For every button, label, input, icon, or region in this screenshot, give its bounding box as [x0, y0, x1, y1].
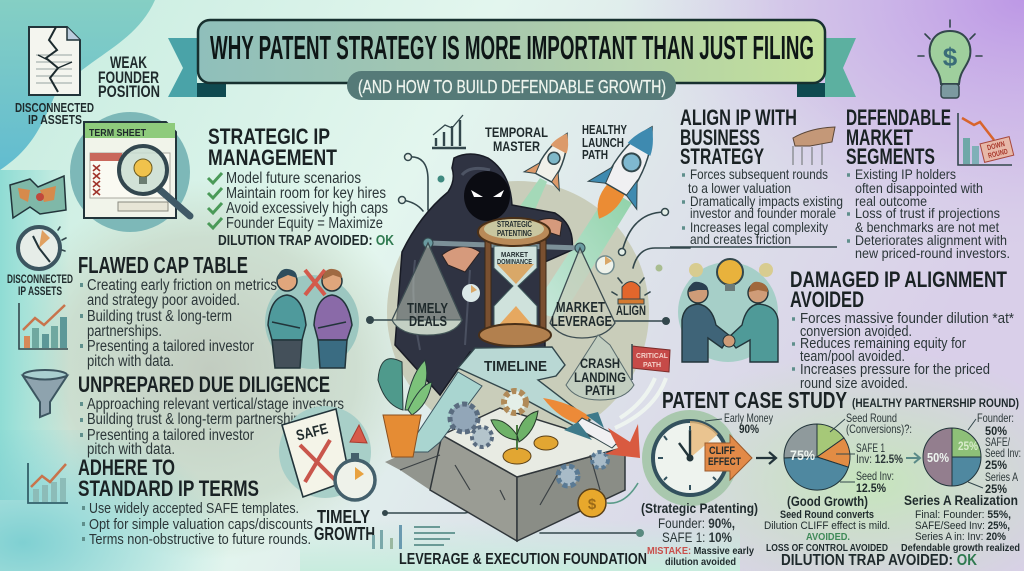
- bullets: round size avoided.: [800, 376, 908, 392]
- pie labels: 25%: [985, 458, 1007, 472]
- panel: patent case study: [641, 387, 1021, 569]
- mini data ticks: [372, 525, 455, 549]
- pie labels: Seed Round: [846, 411, 897, 425]
- bullets: Dramatically impacts existing: [690, 193, 843, 209]
- label: DISCONNECTED: [7, 274, 73, 286]
- bullets: to a lower valuation: [688, 180, 791, 196]
- icon: cracked document: [29, 27, 80, 95]
- pie chart: series A: 50%: [927, 450, 949, 465]
- icon: dollar light bulb: [918, 20, 982, 98]
- hourglass labels: STRATEGIC: [497, 220, 532, 229]
- hourglass: [478, 218, 551, 346]
- checklist: Founder Equity = Maximize: [226, 215, 383, 232]
- bullets: Reduces remaining equity for: [800, 336, 966, 352]
- checklist: Maintain room for key hires: [226, 185, 386, 202]
- hourglass labels: PATENTING: [497, 229, 532, 238]
- pie labels: [968, 411, 1021, 496]
- bullets: Opt for simple valuation caps/discounts: [89, 517, 313, 533]
- bullets: Building trust & long-term partnerships: [87, 411, 307, 428]
- icon: clock with cliff effect arrow: CLIFF: [709, 445, 735, 457]
- timeline ribbon: TIMELINE: [484, 358, 547, 375]
- bullets: Loss of trust if projections: [855, 205, 1000, 221]
- flag: critical path: [632, 344, 670, 380]
- icon: mini chart: [432, 115, 466, 148]
- heading: [662, 387, 1019, 413]
- label: HEALTHY: [582, 122, 627, 137]
- bullets: Increases legal complexity: [690, 219, 828, 235]
- panel: adhere to standard IP terms: [78, 455, 313, 548]
- icon: clock with cliff effect arrow: EFFECT: [708, 456, 741, 468]
- rocket trail: [532, 190, 632, 320]
- subtitle pill: (AND HOW TO BUILD DEFENDABLE GROWTH): [358, 77, 666, 97]
- caption: good growth: AVOIDED.: [806, 531, 850, 543]
- icon: dollar coin: $: [588, 496, 597, 513]
- icon: stone block foundation: [385, 408, 625, 541]
- pie labels: 50%: [985, 424, 1007, 438]
- icon: large rocket: [575, 113, 676, 233]
- right pan: MARKET: [556, 299, 605, 316]
- caption: strategic patenting: dilution avoided: [665, 556, 736, 568]
- caption: strategic patenting: Founder: 90%,: [658, 515, 735, 531]
- bullets: [80, 396, 344, 458]
- caption: strategic patenting: [641, 500, 758, 568]
- bullets: often disappointed with: [855, 180, 983, 196]
- bullets: real outcome: [855, 193, 927, 209]
- caption: series A realization: Final: Founder: 55%,: [915, 509, 1011, 521]
- caption: strategic patenting: (Strategic Patenting): [641, 500, 758, 516]
- early money label: Early Money: [724, 411, 773, 425]
- right pan: LEVERAGE: [551, 313, 612, 330]
- bullets: [80, 277, 277, 370]
- pie labels: 12.5%: [856, 481, 886, 495]
- balance scale: [392, 238, 615, 338]
- status: DILUTION TRAP AVOIDED: OK: [218, 233, 394, 249]
- pie labels: (Conversions)?:: [846, 422, 912, 436]
- checklist: Avoid excessively high caps: [226, 200, 388, 217]
- bullets: partnerships.: [87, 323, 162, 340]
- crash landing shield: CRASH: [580, 355, 620, 371]
- hourglass labels: DOMINANCE: [497, 259, 532, 266]
- heading: SEGMENTS: [846, 144, 935, 169]
- caption: good growth: [764, 493, 890, 554]
- connectors: [366, 154, 690, 537]
- central illustration: grey circle: [387, 181, 649, 443]
- bullets: Increases pressure for the priced: [800, 362, 990, 378]
- heading: DEFENDABLE: [846, 105, 951, 130]
- reaper face: [464, 171, 510, 221]
- bullets: team/pool avoided.: [800, 349, 905, 365]
- checklist: [208, 170, 388, 232]
- crash landing shield: PATH: [585, 382, 615, 398]
- icon: crossed out SAFE note with stopwatch: [279, 406, 375, 500]
- bullets: & benchmarks are not met: [855, 219, 999, 235]
- hourglass labels: MARKET: [501, 252, 529, 259]
- bullets: investor and founder morale: [690, 205, 836, 221]
- bullets: [792, 311, 1014, 392]
- heading: BUSINESS: [680, 125, 760, 150]
- banner plate: [198, 20, 825, 83]
- panel: align IP with business strategy: [680, 105, 843, 247]
- right pan: [550, 248, 615, 338]
- panel: weak founder position: [15, 27, 160, 127]
- left pan: TIMELY: [407, 300, 448, 317]
- icon: down round chart: ROUND: [987, 147, 1009, 160]
- bullets: pitch with data.: [87, 353, 174, 370]
- pie labels: SAFE 1: [856, 441, 885, 455]
- pie chart: series A: [923, 428, 981, 486]
- left pan: [392, 243, 462, 335]
- heading: FOUNDER: [98, 68, 159, 87]
- label: ALIGN: [616, 303, 646, 318]
- label: TIMELY: [317, 507, 370, 527]
- icon: gears: [450, 391, 608, 486]
- caption: good growth: Seed Round converts: [780, 509, 874, 521]
- left pan: DEALS: [409, 313, 447, 330]
- label: [15, 100, 94, 127]
- icon: potted plant: [378, 359, 432, 457]
- panel: damaged IP alignment avoided: [790, 267, 1014, 392]
- label: MASTER: [493, 138, 540, 154]
- icon: down round chart: [958, 113, 1014, 165]
- flag: critical path: CRITICAL: [636, 351, 668, 360]
- icon: broken clock: [18, 227, 66, 269]
- label: [7, 274, 73, 298]
- heading: POSITION: [98, 82, 160, 101]
- icon: term sheet with magnifier: TERM SHEET: [89, 127, 146, 139]
- label: DISCONNECTED: [15, 100, 94, 115]
- label: [485, 124, 548, 154]
- heading: STRATEGY: [680, 144, 764, 169]
- subtitle pill: [347, 71, 676, 100]
- icon: crashing rocket: [543, 398, 640, 458]
- icon: two founders arguing: [265, 269, 359, 369]
- foundation label: LEVERAGE & EXECUTION FOUNDATION: [399, 551, 647, 568]
- small arrow: [607, 483, 638, 503]
- bullets: pitch with data.: [87, 441, 175, 458]
- caption: series A realization: Series A in: Inv: 20%: [915, 531, 1006, 543]
- pie chart: series A: 25%: [958, 439, 978, 453]
- reaper figure: [395, 154, 572, 395]
- bullets: Presenting a tailored investor: [87, 427, 254, 444]
- checklist: Model future scenarios: [226, 170, 361, 187]
- heading: [208, 124, 337, 170]
- icon: handshake with light bulb: [678, 259, 778, 362]
- heading: UNPREPARED DUE DILIGENCE: [78, 372, 330, 397]
- bullets: and strategy poor avoided.: [87, 292, 240, 309]
- panel: strategic IP management: [208, 124, 394, 249]
- icon: alarm: [612, 278, 650, 304]
- pie labels: Seed Inv:: [856, 469, 894, 483]
- label: [314, 507, 375, 544]
- label: [582, 122, 627, 162]
- heading: [790, 267, 1007, 312]
- icon: mini clock: [596, 256, 614, 274]
- caption: strategic patenting: SAFE 1: 10%: [662, 529, 732, 545]
- label: GROWTH: [314, 524, 375, 544]
- icon: clock with cliff effect arrow: [642, 410, 752, 506]
- label: IP ASSETS: [28, 112, 82, 127]
- hourglass labels: [497, 220, 532, 266]
- crash landing shield: LANDING: [574, 369, 626, 385]
- heading: STRATEGIC IP: [208, 124, 330, 149]
- crash landing shield: [566, 335, 634, 400]
- bullets: Forces subsequent rounds: [690, 166, 828, 182]
- heading: FLAWED CAP TABLE: [78, 252, 248, 278]
- heading: AVOIDED: [790, 287, 864, 312]
- early money label: 90%: [739, 422, 759, 436]
- icon: funnel: [23, 370, 67, 417]
- icon: dollar light bulb: $: [943, 42, 958, 72]
- bullets: Terms non-obstructive to future rounds.: [89, 532, 311, 548]
- mini clock: [462, 284, 480, 302]
- flag: critical path: PATH: [643, 360, 661, 369]
- bullets: Creating early friction on metrics: [87, 277, 277, 294]
- early money label: [705, 411, 773, 436]
- icon: sprout and coins: [491, 411, 558, 464]
- bullets: [682, 166, 843, 247]
- icon: growth chart: [28, 463, 68, 503]
- label: TEMPORAL: [485, 124, 548, 140]
- bullets: conversion avoided.: [800, 324, 912, 340]
- label: LAUNCH: [582, 135, 624, 150]
- bullets: Presenting a tailored investor: [87, 338, 254, 355]
- heading: WEAK: [110, 53, 148, 72]
- caption: good growth: Dilution CLIFF effect is mild.: [764, 520, 890, 532]
- ribbon tails: [168, 38, 856, 97]
- icon: term sheet with magnifier: [70, 112, 190, 232]
- bullets: Approaching relevant vertical/stage investors: [87, 396, 344, 413]
- icon: dollar coin: [578, 489, 606, 517]
- icon: down round chart: DOWN: [986, 139, 1006, 152]
- heading: [680, 105, 797, 169]
- bullets: Deteriorates alignment with: [855, 232, 1007, 248]
- reaper hands: [535, 218, 562, 236]
- heading: STANDARD IP TERMS: [78, 476, 259, 501]
- caption: good growth: LOSS OF CONTROL AVOIDED: [766, 542, 888, 554]
- bullets: Use widely accepted SAFE templates.: [89, 501, 299, 517]
- divider: [670, 246, 837, 248]
- title banner: [168, 20, 856, 100]
- heading: MANAGEMENT: [208, 145, 337, 170]
- pie chart: seed round: [784, 424, 850, 490]
- bullets: Building trust & long-term: [87, 308, 232, 325]
- bullets: [847, 166, 1010, 261]
- heading: [98, 53, 160, 101]
- heading: PATENT CASE STUDY: [662, 387, 847, 413]
- icon: bar chart: [19, 303, 68, 349]
- label: IP ASSETS: [18, 286, 62, 298]
- caption: series A realization: [901, 492, 1020, 554]
- heading: MARKET: [846, 125, 913, 150]
- bullets: Existing IP holders: [855, 166, 956, 182]
- heading: ADHERE TO: [78, 455, 175, 480]
- icon: small rocket: [507, 124, 585, 222]
- arrow: [756, 452, 776, 464]
- bullets: new priced-round investors.: [855, 245, 1010, 261]
- caption: good growth: (Good Growth): [787, 493, 868, 509]
- pie labels: Founder:: [977, 411, 1014, 425]
- pie chart: seed round: 75%: [790, 447, 815, 463]
- bullets: [82, 501, 313, 548]
- panel: unprepared due diligence: [78, 372, 344, 458]
- caption: strategic patenting: MISTAKE: Massive early: [647, 545, 754, 557]
- panel: defendable market segments: [846, 105, 1014, 261]
- arrow: [906, 453, 920, 463]
- status: DILUTION TRAP AVOIDED: OK: [781, 552, 977, 569]
- panel: flawed cap table: [78, 252, 277, 370]
- pie labels: Inv: 12.5%: [856, 452, 903, 466]
- crash path streaks: [615, 378, 666, 428]
- heading: [78, 455, 259, 501]
- pie labels: 25%: [985, 482, 1007, 496]
- icon: crossed out SAFE note with stopwatch: SAFE: [295, 420, 330, 445]
- heading: ALIGN IP WITH: [680, 105, 797, 130]
- icon: puppet hand: [793, 127, 835, 165]
- heading: [846, 105, 951, 169]
- bullets: and creates friction: [690, 231, 791, 247]
- icon: torn map: [10, 176, 66, 218]
- label: PATH: [582, 147, 608, 162]
- pie labels: [830, 411, 912, 495]
- caption: series A realization: SAFE/Seed Inv: 25%,: [915, 520, 1010, 532]
- pie labels: SAFE/: [985, 435, 1010, 449]
- timeline ribbon: [405, 347, 590, 452]
